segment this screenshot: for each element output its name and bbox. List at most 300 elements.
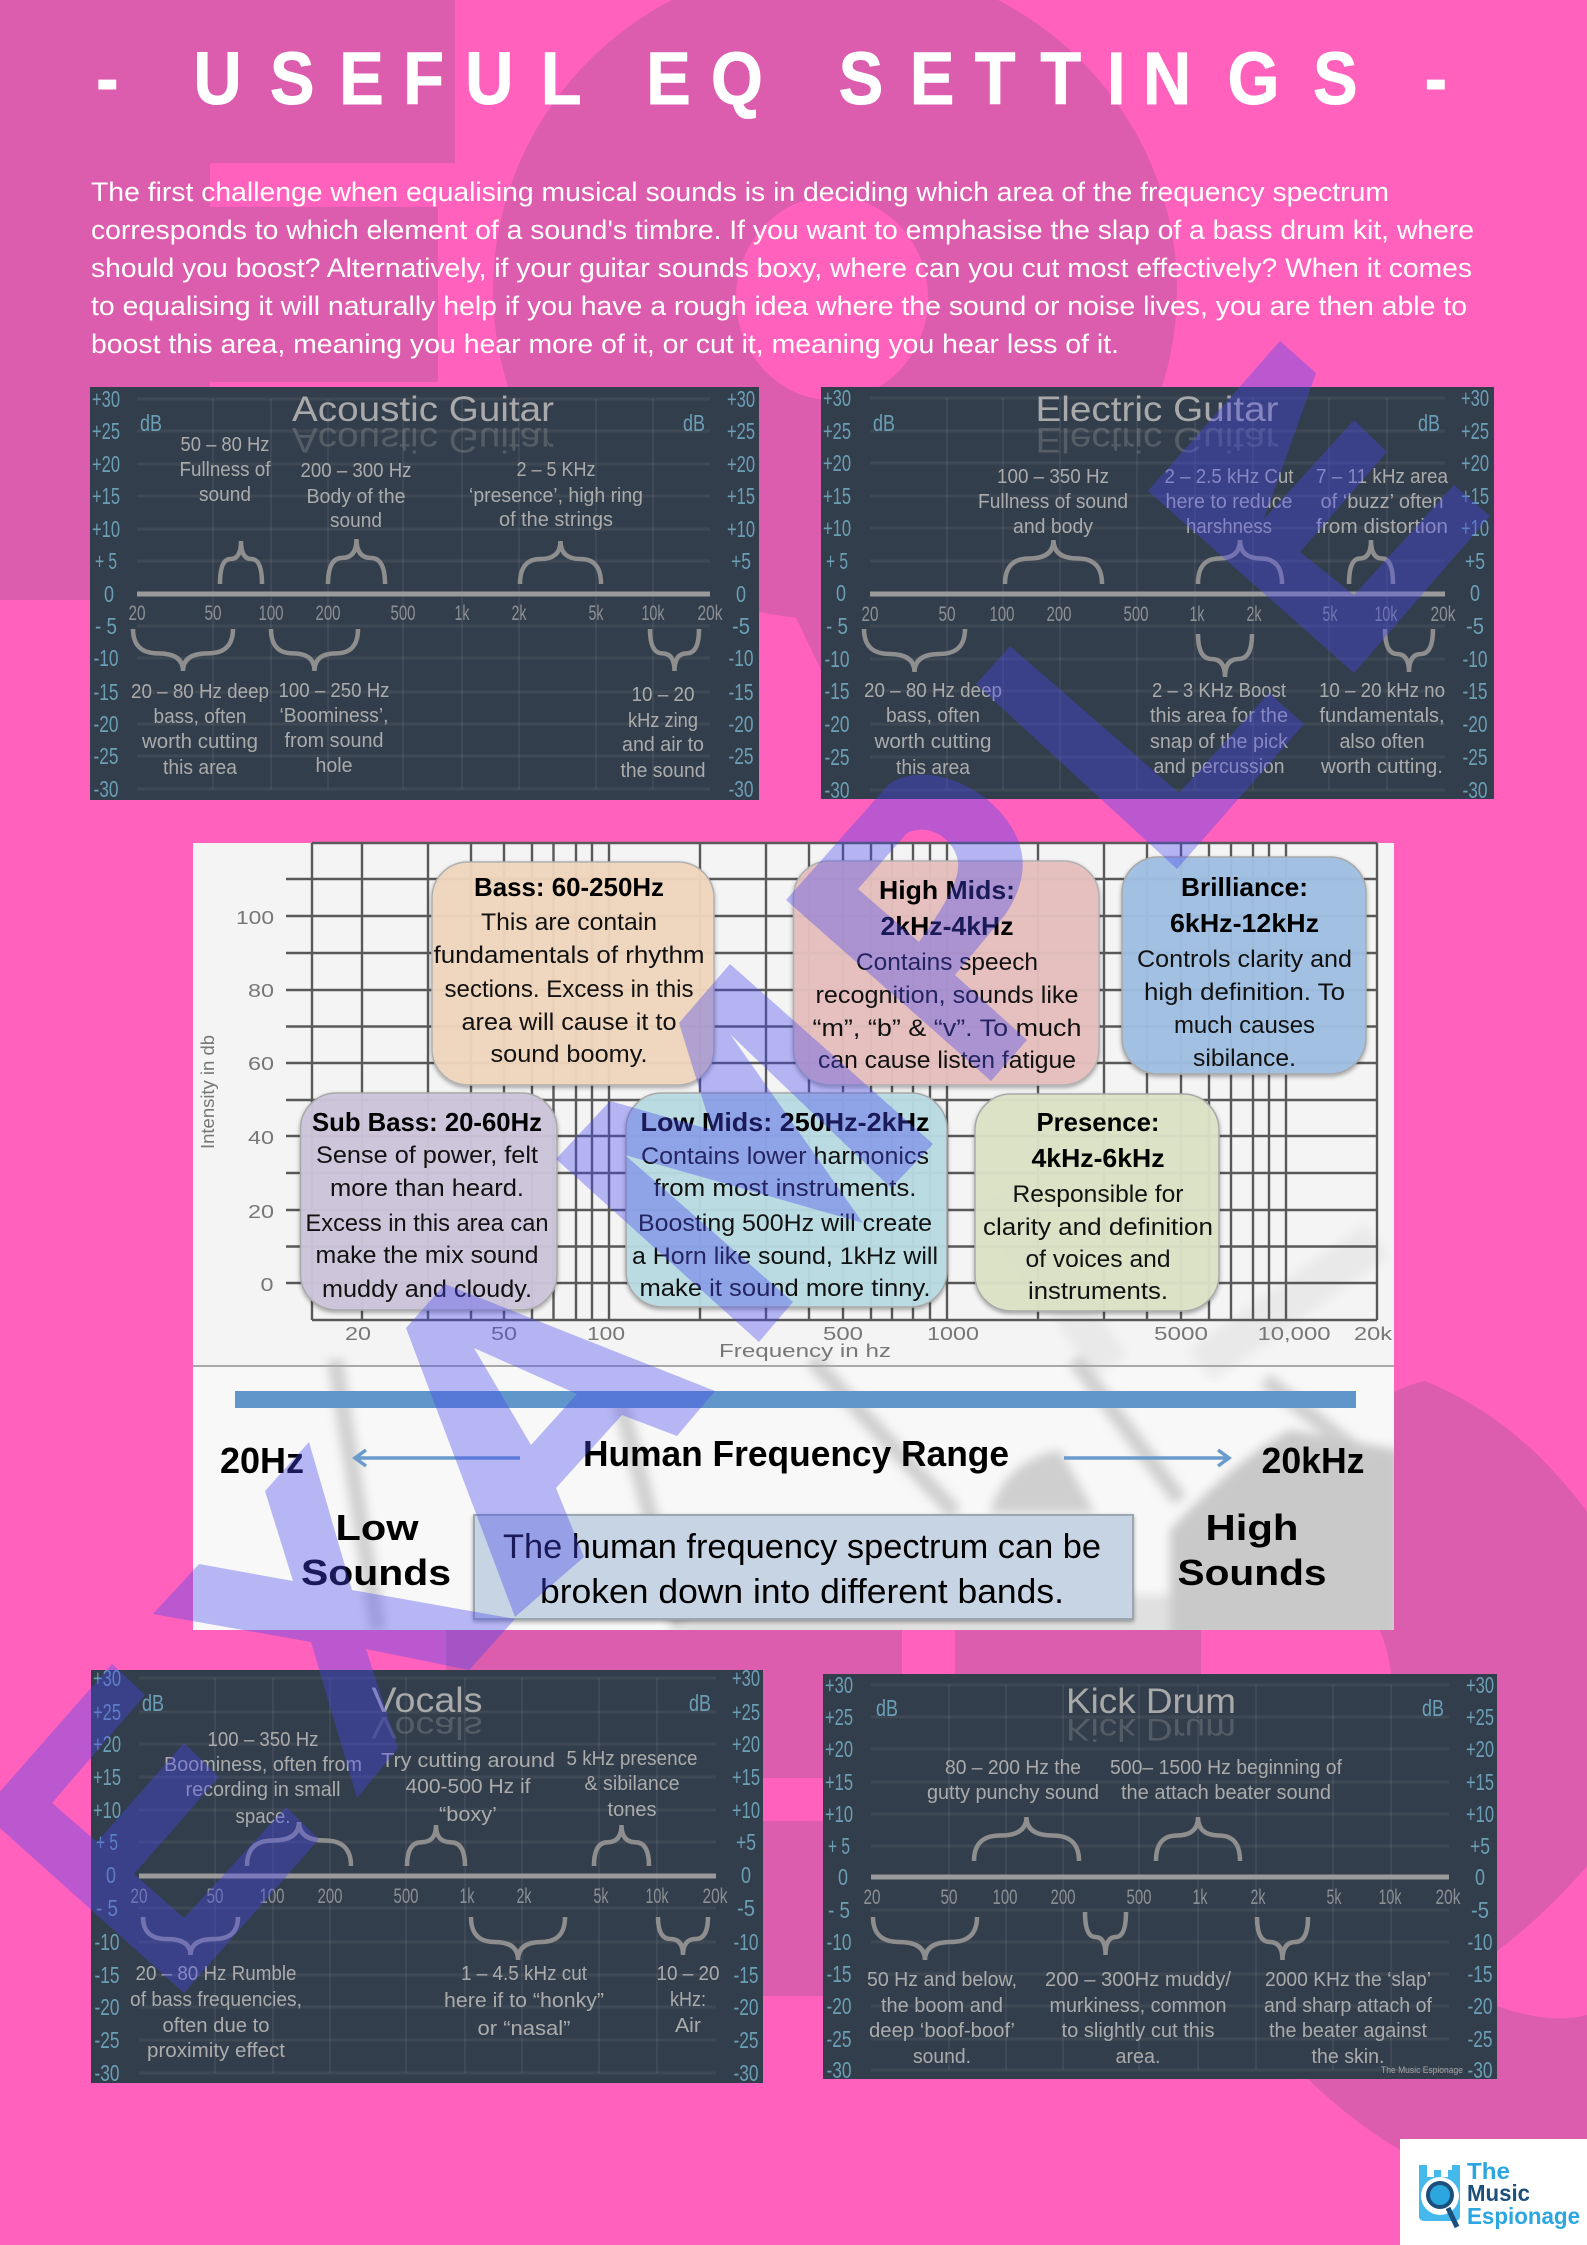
db scale right: 0	[1475, 1864, 1485, 1890]
frequency axis labels: 500	[394, 1885, 418, 1908]
annotation: 80-200 Hz: gutty punchy sound	[927, 1782, 1099, 1804]
x axis labels: 20k	[1354, 1324, 1393, 1344]
annotation: 20-80 Hz: this area	[896, 757, 971, 779]
box: low mids: from most instruments.	[654, 1175, 916, 1202]
annotation: 400-500 Hz	[381, 1750, 555, 1826]
db scale right: +15	[727, 483, 755, 509]
annotation: 50 Hz: 50 Hz and below,	[867, 1969, 1017, 1991]
annotation: 2000 KHz: the beater against	[1269, 2020, 1427, 2042]
db scale right: -10	[1462, 646, 1488, 672]
annotation: 200-300 Hz	[300, 460, 412, 532]
db scale right: dB	[1422, 1695, 1444, 1721]
x axis labels: 20	[345, 1324, 371, 1344]
frequency axis labels: 5k	[588, 602, 604, 625]
callout: spectrum note	[474, 1515, 1133, 1619]
frequency axis labels: 2k	[1246, 603, 1262, 626]
box: high mids: 2kHz-4kHz	[880, 911, 1014, 941]
db scale left: +10	[823, 515, 851, 541]
box: low mids: make it sound more tinny.	[640, 1275, 930, 1302]
db scale right: +15	[1466, 1769, 1494, 1795]
db scale right: +30	[1466, 1672, 1494, 1698]
box: brilliance: high definition. To	[1144, 979, 1345, 1006]
db scale right: +25	[1461, 418, 1489, 444]
frequency axis labels: 5k	[594, 1885, 609, 1908]
frequency axis labels: 50	[206, 1885, 224, 1908]
frequency axis labels: 10k	[1378, 1886, 1402, 1909]
x axis labels: 50	[491, 1324, 517, 1344]
annotation: 200-300 Hz: area.	[1116, 2046, 1160, 2068]
db scale left: -10	[94, 645, 118, 671]
frequency axis labels: 20k	[1436, 1886, 1461, 1909]
annotation: 5 kHz	[566, 1748, 698, 1821]
credit: The Music Espionage	[1381, 2065, 1463, 2075]
box: low mids: a Horn like sound, 1kHz will	[632, 1243, 938, 1270]
annotation: 100-350 Hz: recording in small	[186, 1779, 340, 1801]
db scale left: -20	[824, 711, 850, 737]
annotation: 100-350 Hz: 100 – 350 Hz	[997, 466, 1109, 488]
db scale left: +30	[823, 385, 851, 411]
db scale right: -15	[734, 1962, 758, 1988]
box: sub bass: muddy and cloudy.	[322, 1276, 532, 1303]
annotation: 20-80 Hz: 20 – 80 Hz deep	[131, 681, 269, 703]
db scale right	[1422, 1672, 1494, 2083]
frequency axis labels: 50	[940, 1886, 958, 1909]
y axis labels: Intensity in db	[198, 1035, 218, 1149]
frequency axis labels: 20k	[702, 1885, 728, 1908]
db scale left: +15	[823, 483, 851, 509]
box: high mids: Contains speech	[856, 949, 1038, 976]
frequency axis labels: 2k	[516, 1885, 532, 1908]
label: 20kHz: 20kHz	[1262, 1440, 1364, 1481]
frequency axis labels: 500	[1124, 603, 1148, 626]
db scale left: -20	[94, 711, 118, 737]
db scale right: +5	[736, 1829, 756, 1855]
annotation: 10-20 kHz	[620, 684, 706, 782]
db scale left: +10	[93, 1797, 121, 1823]
box: brilliance: 6kHz-12kHz	[1170, 908, 1319, 938]
frequency axis labels: 50	[204, 602, 222, 625]
db scale right: -20	[734, 1994, 758, 2020]
db scale right: -10	[1468, 1929, 1492, 1955]
db scale left: 0	[106, 1862, 116, 1888]
annotation: 10-20 kHz	[656, 1963, 720, 2037]
annotation: 2000 KHz: and sharp attach of	[1264, 1995, 1432, 2017]
annotation: 20-80 Hz	[131, 681, 269, 779]
annotation: 200-300 Hz: 200 – 300Hz muddy/	[1045, 1969, 1231, 1991]
braces	[133, 539, 699, 671]
annotation: 2-2.5 kHz: 2 – 2.5 kHz Cut	[1164, 466, 1294, 488]
box: sub bass: Sub Bass: 20-60Hz	[312, 1107, 542, 1137]
annotation: 2000 KHz: the skin.	[1312, 2046, 1384, 2068]
frequency axis labels: 200	[1046, 603, 1072, 626]
icon: hand with magnifier	[1419, 2165, 1460, 2227]
annotation: 400-500 Hz: Try cutting around	[381, 1750, 555, 1772]
db scale left: 0	[104, 581, 114, 607]
annotation: 10-20 kHz: also often	[1340, 731, 1424, 753]
db scale left: -25	[824, 744, 850, 770]
x axis labels: Frequency in hz	[719, 1341, 891, 1361]
x axis labels: 5000	[1154, 1324, 1208, 1344]
annotation: 50 Hz	[867, 1969, 1017, 2068]
db scale right: -25	[1462, 744, 1488, 770]
box: bass: sound boomy.	[490, 1041, 648, 1068]
frequency axis labels: 100	[260, 1885, 284, 1908]
annotation: 2-5 KHz	[469, 459, 643, 531]
frequency range bar	[235, 1391, 1356, 1408]
annotation: 5 kHz: 5 kHz presence	[566, 1748, 698, 1770]
frequency axis labels	[130, 1885, 728, 1908]
frequency axis labels: 200	[316, 602, 340, 625]
db scale left: -30	[826, 2057, 852, 2083]
label: low sounds: Sounds	[301, 1552, 451, 1593]
y axis labels: 100	[236, 908, 274, 928]
db scale left: -15	[826, 1961, 852, 1987]
label: low sounds	[301, 1507, 451, 1593]
db scale left: +20	[823, 450, 851, 476]
annotation: 2-2.5 kHz: harshness	[1186, 516, 1272, 538]
heading	[372, 1681, 482, 1744]
db scale right: dB	[689, 1690, 711, 1716]
annotation: 200-300 Hz: Body of the	[306, 486, 406, 508]
annotation: 20-80 Hz	[130, 1963, 302, 2062]
annotation: 7-11 kHz: of ‘buzz’ often	[1320, 491, 1444, 513]
db scale right: -10	[728, 645, 754, 671]
db scale left: -25	[94, 743, 118, 769]
db scale right: 0	[736, 581, 746, 607]
db scale left	[825, 1672, 898, 2083]
box: presence	[975, 1094, 1219, 1311]
db scale left: -15	[94, 1962, 120, 1988]
db scale right: +5	[731, 548, 751, 574]
annotation: 20-80 Hz: worth cutting	[141, 731, 258, 753]
db scale right: +30	[732, 1665, 760, 1691]
box: brilliance: Brilliance:	[1181, 872, 1308, 902]
frequency axis labels: 2k	[512, 602, 527, 625]
arrow: left	[355, 1450, 520, 1466]
box: brilliance: much causes	[1174, 1012, 1315, 1039]
intro text block: boost this area, meaning you hear more of it, or cut it, meaning you hear less of it.	[91, 329, 1119, 359]
db scale right: -30	[734, 2060, 758, 2086]
annotation: 10-20 kHz: and air to	[622, 734, 704, 756]
annotation: 10-20 kHz: 10 – 20 kHz no	[1319, 680, 1445, 702]
watermark: EXAMPLE	[0, 341, 1490, 1993]
box: sub bass: Excess in this area can	[306, 1210, 548, 1237]
frequency axis labels: 500	[1126, 1886, 1152, 1909]
box: presence: of voices and	[1026, 1246, 1170, 1273]
db scale right: dB	[1418, 410, 1440, 436]
db scale left: dB	[876, 1695, 898, 1721]
frequency axis labels: 5k	[1322, 603, 1338, 626]
annotation: 100-250 Hz: ‘Boominess’,	[280, 705, 388, 727]
db scale left: +15	[93, 1764, 121, 1790]
db scale left	[93, 1665, 164, 2086]
annotation: 80-200 Hz	[927, 1757, 1099, 1804]
x axis labels: 100	[587, 1324, 625, 1344]
db scale left: +30	[92, 386, 120, 412]
db scale left: -15	[94, 679, 118, 705]
annotation: 50 Hz: deep ‘boof-boof’	[869, 2020, 1015, 2042]
box: brilliance	[1122, 857, 1366, 1074]
heading	[292, 390, 554, 459]
db scale left: +15	[92, 483, 120, 509]
lower photo background	[193, 1200, 1400, 1640]
annotation: 2-3 KHz: this area for the	[1150, 705, 1288, 727]
label: high sounds: Sounds	[1178, 1552, 1326, 1593]
db scale left: - 5	[95, 613, 117, 639]
db scale right: -25	[734, 2027, 758, 2053]
annotation: 20-80 Hz: proximity effect	[147, 2040, 285, 2062]
annotation: 100-250 Hz: 100 – 250 Hz	[278, 680, 390, 702]
db scale left: +25	[92, 418, 120, 444]
db scale right: +15	[1461, 483, 1489, 509]
db scale left: -20	[94, 1994, 120, 2020]
frequency axis labels: 2k	[1250, 1886, 1266, 1909]
frequency axis labels	[864, 1886, 1461, 1909]
annotation: 80-200 Hz: 80 – 200 Hz the	[945, 1757, 1081, 1779]
db scale right: -15	[728, 679, 754, 705]
db scale right: +10	[727, 516, 755, 542]
box: bass: This are contain	[481, 909, 657, 936]
box: bass: sections. Excess in this	[444, 976, 694, 1003]
box: sub bass: Sense of power, felt	[316, 1142, 538, 1169]
intro text block: to equalising it will naturally help if you have a rough idea where the sound or noise lives, you are then able to	[91, 291, 1467, 321]
x axis labels: 1000	[927, 1324, 979, 1344]
db scale right: +20	[1461, 450, 1489, 476]
heading: Vocals	[372, 1681, 482, 1720]
db scale left: -30	[94, 776, 118, 802]
y axis labels: 20	[248, 1202, 274, 1222]
db scale right	[1418, 385, 1489, 803]
frequency axis labels: 10k	[642, 602, 665, 625]
frequency axis labels: 20	[864, 1886, 880, 1909]
box: presence: clarity and definition	[983, 1214, 1213, 1241]
db scale left	[92, 386, 162, 802]
heading	[1066, 1682, 1236, 1746]
db scale left: - 5	[826, 613, 848, 639]
annotation: 10-20 kHz: 10 – 20	[656, 1963, 720, 1985]
callout: spectrum note: The human frequency spectrum can be	[503, 1528, 1101, 1566]
db scale right: dB	[683, 410, 705, 436]
annotation: 7-11 kHz: from distortion	[1316, 516, 1448, 538]
frequency axis labels: 200	[1050, 1886, 1076, 1909]
y axis labels	[198, 908, 274, 1295]
annotation: 2000 KHz: 2000 KHz the ‘slap’	[1265, 1969, 1431, 1991]
frequency axis labels: 1k	[454, 602, 470, 625]
annotation: 200-300 Hz: to slightly cut this	[1062, 2020, 1214, 2042]
box: bass: Bass: 60-250Hz	[474, 872, 664, 902]
annotation: 2-5 KHz: 2 – 5 KHz	[516, 459, 596, 481]
box: high mids: can cause listen fatigue	[818, 1047, 1076, 1074]
box: presence: 4kHz-6kHz	[1032, 1143, 1164, 1173]
db scale right: +30	[727, 386, 755, 412]
y axis labels: 40	[248, 1128, 274, 1148]
y axis labels: 0	[260, 1275, 274, 1295]
db scale right: +20	[727, 451, 755, 477]
panel: acoustic guitar	[90, 386, 759, 802]
box: high mids: recognition, sounds like	[816, 982, 1078, 1009]
annotation: 100-350 Hz: space.	[236, 1806, 290, 1828]
db scale right: -20	[728, 711, 754, 737]
db scale left: 0	[836, 580, 846, 606]
frequency axis labels: 100	[992, 1886, 1018, 1909]
frequency axis labels: 100	[258, 602, 284, 625]
db scale right: +5	[1470, 1833, 1490, 1859]
annotation: 10-20 kHz: 10 – 20	[632, 684, 694, 706]
logo: Espionage	[1467, 2203, 1580, 2229]
db scale right: -15	[1468, 1961, 1492, 1987]
box: brilliance: Controls clarity and	[1137, 946, 1352, 973]
db scale left: -30	[94, 2060, 120, 2086]
annotation: 500-1500 Hz	[1110, 1757, 1342, 1804]
annotation: 2-3 KHz: 2 – 3 KHz Boost	[1152, 680, 1286, 702]
annotation: 20-80 Hz: worth cutting	[873, 731, 992, 753]
frequency axis labels: 50	[938, 603, 956, 626]
db scale right: -5	[1471, 1897, 1489, 1923]
frequency axis labels: 20	[862, 603, 878, 626]
db scale left: +20	[92, 451, 120, 477]
annotation: 10-20 kHz: worth cutting.	[1320, 756, 1443, 778]
db scale left: +30	[825, 1672, 853, 1698]
db scale right: 0	[741, 1862, 751, 1888]
annotation: 50-80 Hz: sound	[199, 484, 251, 506]
db scale left: dB	[140, 410, 162, 436]
db scale left: -10	[824, 646, 850, 672]
db scale right: -30	[728, 776, 754, 802]
db scale right: -20	[1468, 1993, 1492, 2019]
annotation: 20-80 Hz: bass, often	[154, 706, 246, 728]
box: sub bass	[300, 1093, 557, 1310]
box: presence: Responsible for	[1012, 1181, 1184, 1208]
annotation: 2-5 KHz: of the strings	[499, 509, 613, 531]
title: - USEFUL EQ SETTINGS -	[96, 37, 1447, 120]
db scale right: -5	[1466, 613, 1484, 639]
db scale right: +10	[732, 1797, 760, 1823]
db scale left: +10	[92, 516, 120, 542]
heading: Acoustic Guitar	[292, 390, 554, 429]
db scale right: -5	[737, 1895, 755, 1921]
annotation: 20-80 Hz: often due to	[162, 2015, 270, 2037]
frequency axis labels: 20	[130, 1885, 148, 1908]
heading: Acoustic Guitar	[292, 420, 554, 459]
annotation: 50-80 Hz: Fullness of	[180, 459, 271, 481]
db scale left: -10	[826, 1929, 852, 1955]
db scale left: +25	[825, 1704, 853, 1730]
chart grid	[286, 843, 1377, 1320]
panel: electric guitar	[821, 385, 1494, 803]
frequency axis labels: 100	[990, 603, 1014, 626]
intro text block	[91, 177, 1474, 359]
y axis labels: 80	[248, 981, 274, 1001]
annotation: 100-350 Hz	[978, 466, 1128, 538]
annotation: 200-300 Hz: sound	[330, 510, 382, 532]
annotation: 50-80 Hz: 50 – 80 Hz	[180, 434, 270, 456]
frequency axis labels	[862, 603, 1456, 626]
db scale left: -30	[824, 777, 850, 803]
annotation: 10-20 kHz: fundamentals,	[1320, 705, 1444, 727]
annotation: 10-20 kHz: Air	[675, 2015, 701, 2037]
heading: Electric Guitar	[1036, 390, 1279, 429]
panel: vocals	[91, 1665, 763, 2086]
box: presence: instruments.	[1028, 1278, 1168, 1305]
db scale left: -25	[826, 2026, 852, 2052]
annotation: 5 kHz: & sibilance	[584, 1773, 680, 1795]
db scale right: -5	[732, 613, 750, 639]
box: low mids: Boosting 500Hz will create	[638, 1210, 932, 1237]
db scale right: -20	[1462, 711, 1488, 737]
x axis labels	[345, 1324, 1393, 1361]
frequency axis labels: 5k	[1326, 1886, 1342, 1909]
annotation: 2-2.5 kHz: here to reduce	[1166, 491, 1292, 513]
db scale left: + 5	[95, 548, 117, 574]
frequency axis labels: 500	[390, 602, 416, 625]
db scale right: 0	[1470, 580, 1480, 606]
db scale right: -10	[734, 1929, 758, 1955]
db scale right: +20	[732, 1731, 760, 1757]
annotation: 200-300 Hz: 200 – 300 Hz	[300, 460, 412, 482]
box: high mids: High Mids:	[879, 875, 1015, 905]
db scale right: +25	[727, 418, 755, 444]
frequency axis labels: 1k	[460, 1885, 475, 1908]
annotation: 10-20 kHz: kHz zing	[628, 710, 698, 732]
annotation: 50 Hz: sound.	[913, 2046, 971, 2068]
db scale left: dB	[142, 1690, 164, 1716]
db scale left: dB	[873, 410, 895, 436]
annotation: 1-4.5 kHz	[444, 1963, 604, 2040]
heading	[1036, 390, 1279, 459]
box: sub bass: more than heard.	[330, 1175, 524, 1202]
braces	[864, 540, 1433, 677]
box: presence: Presence:	[1036, 1107, 1160, 1137]
annotation: 200-300 Hz: murkiness, common	[1050, 1995, 1226, 2017]
db scale left: -25	[94, 2027, 120, 2053]
label: low sounds: Low	[336, 1507, 420, 1548]
db scale left: + 5	[96, 1829, 118, 1855]
x axis labels: 500	[823, 1324, 863, 1344]
db scale right: +10	[1466, 1801, 1494, 1827]
y axis labels: 60	[248, 1054, 274, 1074]
box: low mids: Low Mids: 250Hz-2kHz	[640, 1107, 930, 1137]
heading: human frequency range: Human Frequency Range	[583, 1433, 1009, 1474]
annotation: 1-4.5 kHz: here if to “honky”	[444, 1990, 604, 2012]
annotation: 2-3 KHz	[1150, 680, 1289, 778]
frequency axis labels: 20	[128, 602, 146, 625]
db scale right: +25	[732, 1699, 760, 1725]
db scale right: +5	[1465, 548, 1485, 574]
annotation: 2000 KHz	[1264, 1969, 1432, 2068]
db scale right	[689, 1665, 760, 2086]
db scale left: +20	[93, 1731, 121, 1757]
db scale right: +25	[1466, 1704, 1494, 1730]
annotation: 2-2.5 kHz	[1164, 466, 1294, 538]
annotation: 5 kHz: tones	[608, 1799, 656, 1821]
frequency axis labels: 1k	[1190, 603, 1205, 626]
box: low mids: Contains lower harmonics	[641, 1143, 929, 1170]
annotation: 1-4.5 kHz: 1 – 4.5 kHz cut	[461, 1963, 587, 1985]
heading: Electric Guitar	[1036, 420, 1279, 459]
box: bass: fundamentals of rhythm	[434, 942, 704, 969]
logo: Music	[1467, 2180, 1530, 2206]
frequency axis labels: 200	[318, 1885, 342, 1908]
db scale left: 0	[838, 1864, 848, 1890]
db scale right: +30	[1461, 385, 1489, 411]
frequency axis labels: 10k	[1374, 603, 1398, 626]
annotation: 500-1500 Hz: the attach beater sound	[1121, 1782, 1331, 1804]
box: sub bass: make the mix sound	[316, 1242, 538, 1269]
db scale left: +15	[825, 1769, 853, 1795]
heading: Vocals	[371, 1709, 483, 1744]
box: high mids: “m”, “b” & “v”. To much	[812, 1015, 1082, 1042]
db scale left: -20	[826, 1993, 852, 2019]
